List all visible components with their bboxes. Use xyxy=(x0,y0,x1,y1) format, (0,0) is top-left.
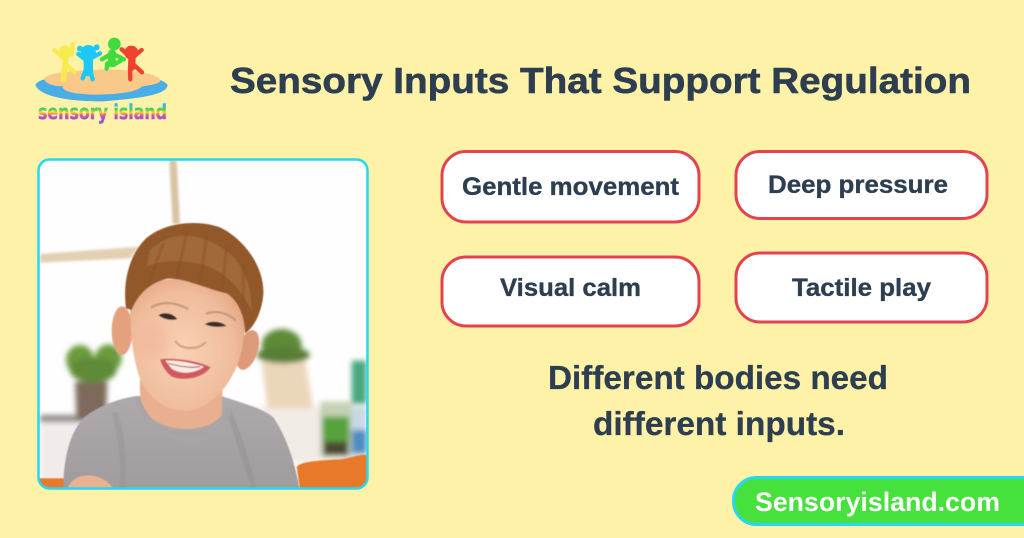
arm xyxy=(68,475,113,488)
right ear xyxy=(236,330,260,370)
eyes xyxy=(158,313,177,320)
website badge: Sensoryisland.com xyxy=(755,487,1000,517)
message text: different inputs. xyxy=(593,405,845,442)
collar xyxy=(137,397,229,439)
logo wordmark: sensory island xyxy=(38,100,167,124)
left cheek xyxy=(131,332,166,354)
logo sand island xyxy=(44,69,161,95)
shirt xyxy=(63,396,300,490)
child xyxy=(63,223,300,490)
nose xyxy=(176,342,205,348)
photo: smiling child xyxy=(38,159,368,490)
logo child yellow xyxy=(54,44,74,79)
chip: visual calm: Visual calm xyxy=(500,274,641,302)
logo child red xyxy=(122,46,142,79)
message text: Different bodies need xyxy=(548,359,888,396)
chip: deep pressure xyxy=(736,152,987,218)
hair xyxy=(125,223,263,333)
chip: deep pressure: Deep pressure xyxy=(768,171,948,199)
chip: gentle movement: Gentle movement xyxy=(462,173,680,201)
logo child green xyxy=(102,38,124,69)
website badge xyxy=(734,478,1024,524)
face xyxy=(130,279,245,411)
background shelf and plants xyxy=(40,329,367,481)
mouth xyxy=(160,359,211,379)
chip: tactile play xyxy=(736,253,987,322)
logo child blue xyxy=(77,44,100,79)
chip: visual calm xyxy=(442,257,699,326)
title: Sensory Inputs That Support Regulation xyxy=(230,60,971,101)
orange sofa xyxy=(38,455,367,490)
chip: tactile play: Tactile play xyxy=(792,274,931,302)
message text xyxy=(548,359,888,442)
window frame xyxy=(40,160,180,263)
logo: sensory island xyxy=(35,38,168,124)
left ear xyxy=(112,306,132,355)
logo water xyxy=(35,74,168,101)
chip: gentle movement xyxy=(442,152,699,222)
neck xyxy=(140,380,223,429)
photo border xyxy=(38,160,368,488)
